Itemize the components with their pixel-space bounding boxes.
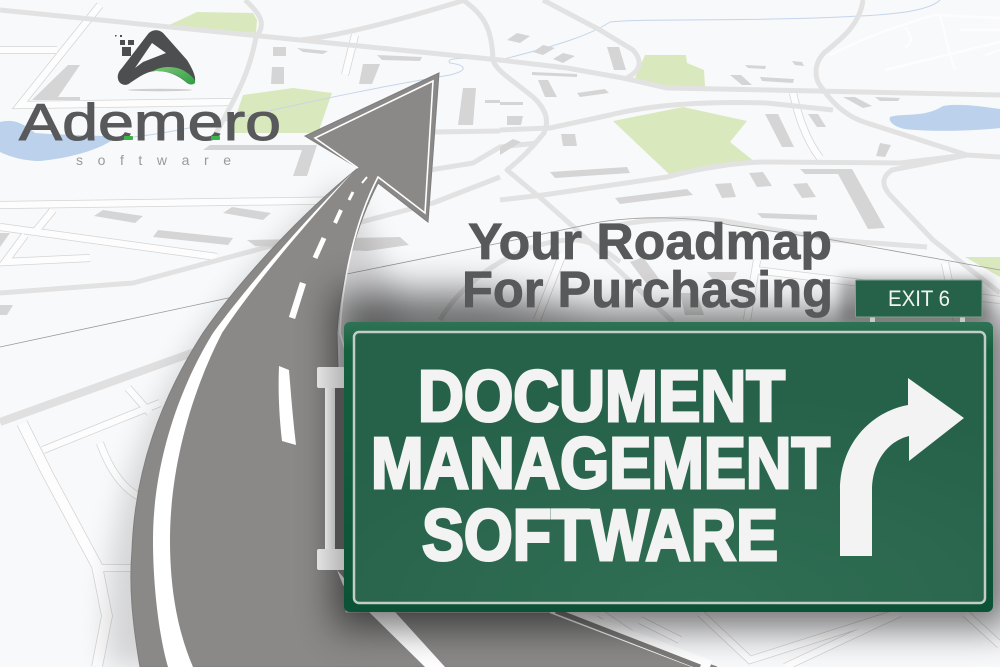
- lane dashes: [292, 177, 367, 318]
- logo mark: [115, 30, 195, 91]
- exit 6 sign: [856, 280, 982, 317]
- heading line 2: For Purchasing: [462, 261, 833, 318]
- heading line 1: Your Roadmap: [468, 213, 832, 270]
- exit sign posts: [870, 316, 965, 323]
- main green sign: [344, 322, 993, 612]
- shadow of the exit sign: [840, 278, 990, 322]
- top-right white street cluster: [830, 15, 1000, 70]
- arrow head white outline: [315, 81, 433, 350]
- left white road edge: [153, 172, 353, 667]
- sign face: [354, 332, 985, 603]
- main grey roads: [0, 0, 1000, 422]
- lower white stripe: [337, 570, 445, 667]
- building blocks: [0, 33, 900, 315]
- lakes: [0, 105, 1000, 161]
- road surface: [131, 73, 717, 667]
- logo wordmark: Ademero: [19, 94, 281, 152]
- icon: right turn arrow: [840, 378, 964, 556]
- green accents: [124, 136, 133, 140]
- document: DOCUMENT: [418, 357, 785, 437]
- thin dark road line: [0, 218, 1000, 347]
- right fork edge: [552, 607, 710, 667]
- software: SOFTWARE: [422, 496, 778, 576]
- thin water lines: [133, 0, 940, 137]
- sign text: [371, 357, 830, 576]
- logo: [19, 30, 281, 168]
- sign body: [344, 322, 993, 612]
- exit 6 label: EXIT 6: [888, 286, 950, 311]
- sign supports: [317, 367, 347, 570]
- logo tagline: software: [76, 152, 231, 168]
- management: MANAGEMENT: [371, 424, 830, 504]
- curved lane dash: [279, 366, 296, 445]
- shadow of the road: [107, 180, 400, 667]
- heading: [462, 213, 833, 318]
- shadow of the sign: [335, 292, 1000, 628]
- parks: [167, 12, 1000, 277]
- road arrow: [131, 73, 717, 667]
